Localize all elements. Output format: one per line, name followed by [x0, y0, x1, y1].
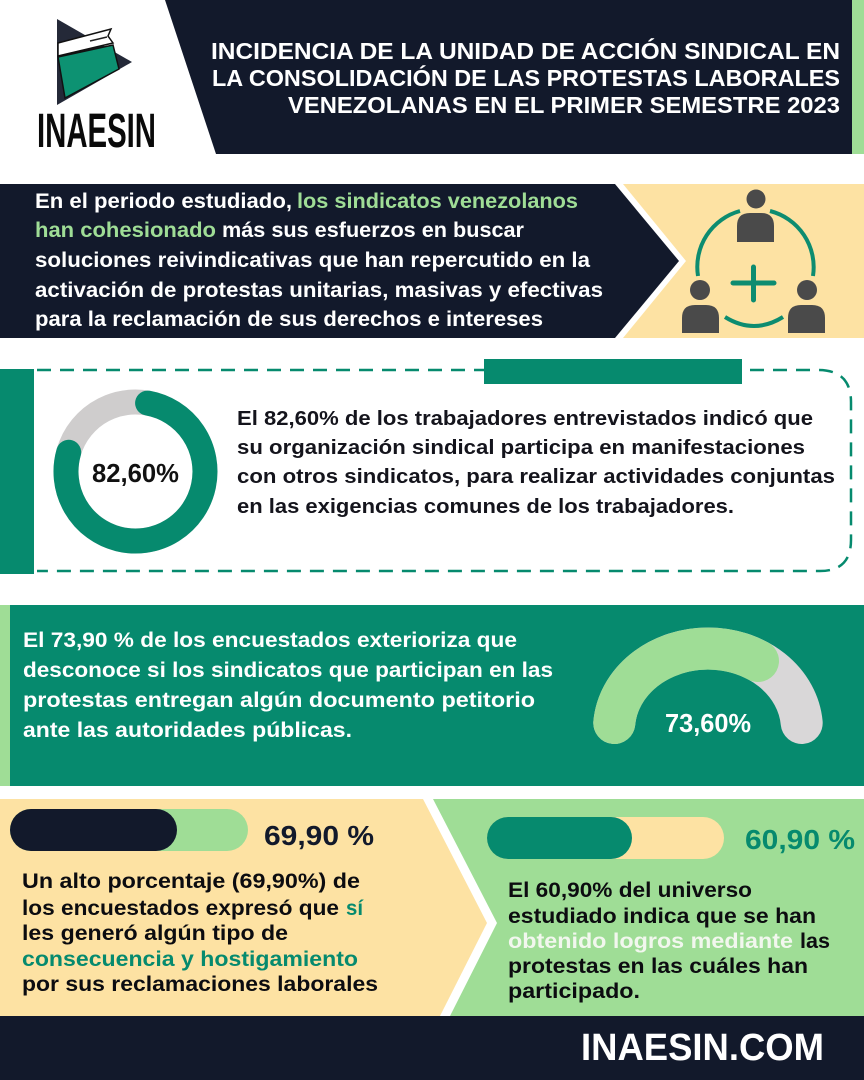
- stat text: ante las autoridades públicas.: [23, 719, 352, 742]
- intro text: los sindicatos venezolanos: [297, 189, 578, 213]
- intro text: para la reclamación de sus derechos e intereses: [35, 307, 543, 331]
- stat text: consecuencia y hostigamiento: [22, 947, 358, 971]
- intro text: soluciones reivindicativas que han repercutido en la: [35, 248, 591, 272]
- panel: 82,60% stat: [0, 359, 851, 574]
- panel: 60,90% stat: [433, 799, 864, 1016]
- title: INCIDENCIA DE LA UNIDAD DE ACCIÓN SINDICAL EN: [211, 37, 840, 64]
- progress bar: 69,90 %: [264, 820, 374, 851]
- gauge chart: [614, 648, 802, 738]
- header banner: [165, 0, 864, 154]
- stat text: [22, 869, 378, 996]
- intro text: [35, 189, 603, 331]
- progress bar: [487, 817, 855, 859]
- gauge chart: 73,60%: [665, 710, 751, 738]
- stat text: en las exigencias comunes de los trabajadores.: [237, 495, 734, 518]
- panel: 69,90% stat: [0, 799, 487, 1016]
- stat text: con otros sindicatos, para realizar actividades conjuntas: [237, 465, 835, 488]
- donut chart: [66, 402, 205, 541]
- stat text: protestas entregan algún documento petitorio: [23, 689, 535, 712]
- stat text: El 60,90% del universo: [508, 878, 752, 902]
- stat text: las: [800, 929, 830, 953]
- intro text: activación de protestas unitarias, masivas y efectivas: [35, 278, 603, 302]
- donut chart: 82,60%: [92, 460, 179, 488]
- stat text: [237, 407, 835, 518]
- logo: INAESIN: [37, 105, 156, 158]
- progress bar: 60,90 %: [745, 824, 855, 855]
- intro text: En el periodo estudiado,: [35, 189, 292, 213]
- title: [211, 37, 840, 118]
- logo: [37, 19, 156, 158]
- intro panel: [0, 184, 864, 338]
- stat text: desconoce si los sindicatos que participan en las: [23, 659, 553, 682]
- stat text: El 73,90 % de los encuestados exterioriza que: [23, 629, 517, 652]
- panel: 73,90% stat: [0, 605, 864, 786]
- stat text: protestas en las cuáles han: [508, 954, 808, 978]
- stat text: los encuestados expresó que: [22, 896, 339, 920]
- stat text: su organización sindical participa en manifestaciones: [237, 436, 805, 459]
- title: LA CONSOLIDACIÓN DE LAS PROTESTAS LABORALES: [212, 64, 840, 91]
- title: VENEZOLANAS EN EL PRIMER SEMESTRE 2023: [288, 92, 840, 118]
- intro text: más sus esfuerzos en buscar: [222, 218, 525, 242]
- footer: INAESIN.COM: [581, 1027, 824, 1069]
- stat text: [23, 629, 553, 742]
- stat text: Un alto porcentaje (69,90%) de: [22, 869, 360, 893]
- stat text: estudiado indica que se han: [508, 904, 816, 928]
- stat text: sí: [346, 896, 364, 920]
- progress bar: [10, 809, 374, 851]
- stat text: El 82,60% de los trabajadores entrevistados indicó que: [237, 407, 813, 430]
- stat text: por sus reclamaciones laborales: [22, 972, 378, 996]
- footer: [0, 1016, 864, 1080]
- stat text: les generó algún tipo de: [22, 921, 288, 945]
- icon: three people united: [682, 190, 825, 333]
- stat text: participado.: [508, 979, 640, 1003]
- stat text: [508, 878, 830, 1003]
- stat text: obtenido logros mediante: [508, 929, 793, 953]
- intro text: han cohesionado: [35, 218, 216, 242]
